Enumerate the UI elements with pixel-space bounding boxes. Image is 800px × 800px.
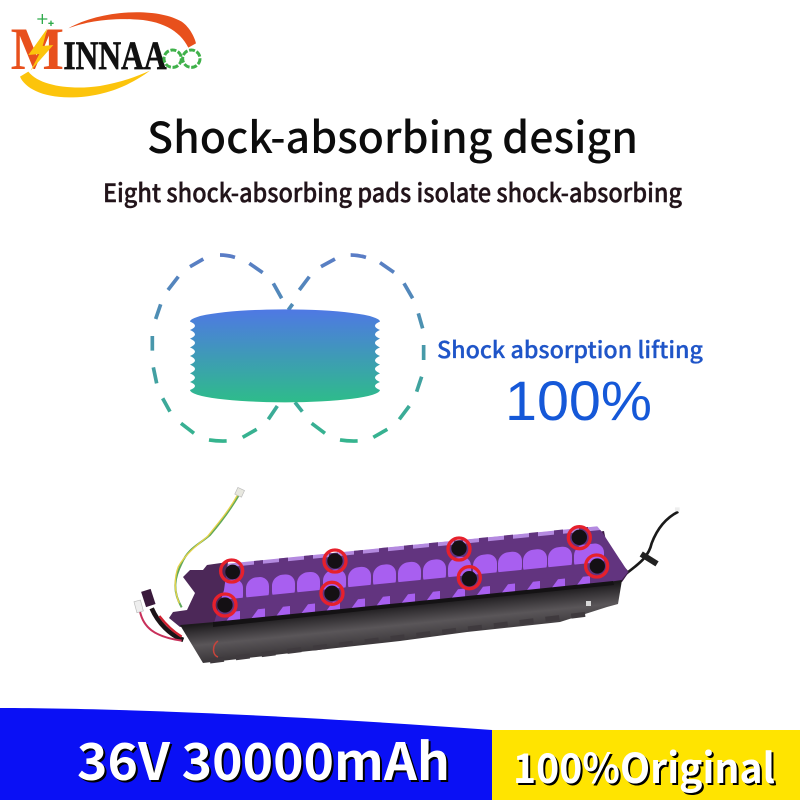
- dashed left lobe: [152, 255, 282, 441]
- logo yellow arc: [20, 71, 150, 97]
- capacity shadow: 36V 30000mAh: [79, 723, 452, 797]
- panel bottom teeth: [210, 613, 596, 661]
- bottom banner: capacity: [0, 708, 492, 800]
- subtitle: Eight shock-absorbing pads isolate shock-absorbing: [103, 174, 683, 210]
- tray black edge: [213, 581, 614, 627]
- logo green rings: [164, 50, 200, 67]
- callout: shock absorption lifting: [437, 331, 703, 432]
- sense wire and connector: [175, 487, 245, 607]
- original text: 100%Original: [513, 735, 775, 795]
- callout value: 100%: [505, 369, 652, 432]
- yellow banner: [492, 730, 800, 800]
- rubber pads with red rings, left half: [214, 550, 346, 616]
- power wires and connectors: [134, 589, 183, 641]
- white tape mark: [586, 601, 591, 606]
- title: Shock-absorbing design: [147, 104, 638, 166]
- logo stars: [37, 14, 54, 26]
- original shadow: 100%Original: [515, 737, 777, 797]
- top rail teeth: [254, 524, 588, 566]
- logo letters INNAA: INNAA: [63, 33, 167, 78]
- bottom banner: original: [492, 730, 800, 800]
- purple tray and cells: [214, 526, 628, 622]
- logo orange arc: [68, 12, 196, 48]
- battery pack photo: [134, 487, 680, 663]
- lower rail: [230, 560, 626, 606]
- logo: MINNAA: [11, 12, 200, 97]
- logo letter M: M: [11, 16, 64, 82]
- callout label: Shock absorption lifting: [437, 331, 703, 365]
- capacity text: 36V 30000mAh: [77, 721, 450, 795]
- dark wrapped side panel: [180, 580, 622, 663]
- tape detail on panel: [214, 641, 218, 657]
- rubber pads with red rings, right half: [448, 527, 608, 589]
- logo lightning bolt: [28, 28, 53, 71]
- tray base: [205, 527, 630, 626]
- ribbed gradient disc: [190, 309, 380, 402]
- cell row: [222, 544, 604, 599]
- right end lumps: [590, 531, 629, 582]
- left end cap: [169, 562, 228, 627]
- output cable with clip: [627, 507, 680, 573]
- lower pockets: [226, 576, 590, 621]
- blue banner: [0, 708, 492, 800]
- pale gap strip behind teeth: [227, 526, 602, 567]
- dashed right lobe: [288, 255, 424, 441]
- shock absorber diagram: [152, 255, 424, 441]
